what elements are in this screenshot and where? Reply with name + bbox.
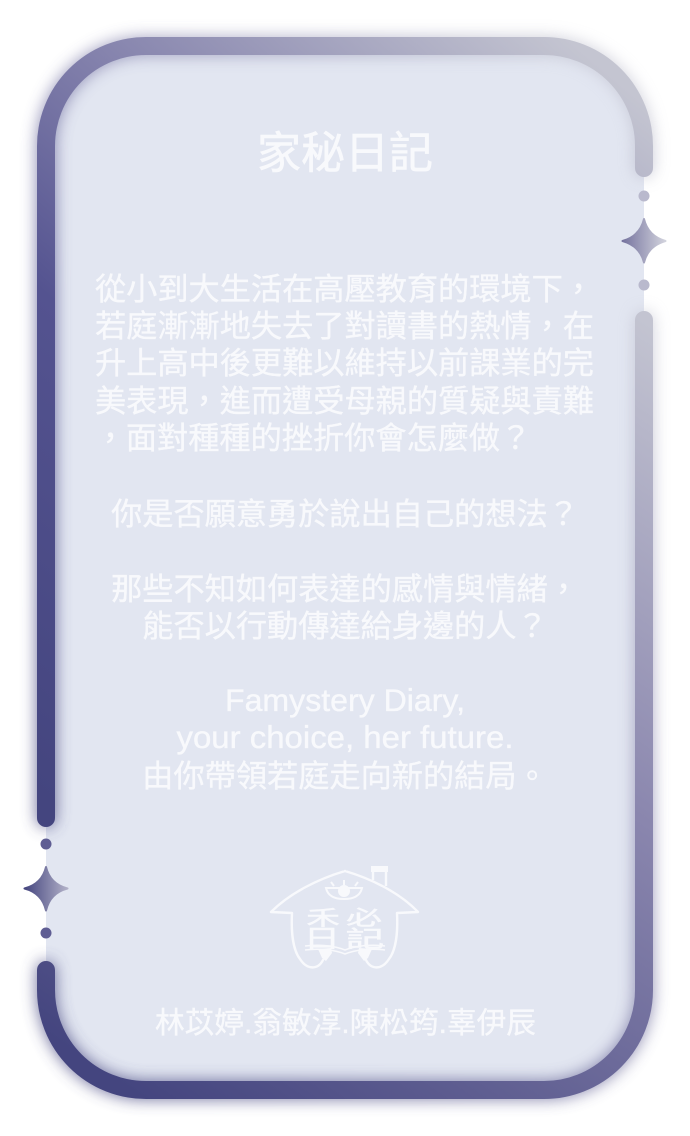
logo: lettering: 禾 xyxy=(306,907,340,929)
text block: closing tagline xyxy=(142,683,548,794)
text block: question one: 你是否願意勇於說出自己的想法？ xyxy=(111,497,579,532)
frame: upper border stroke xyxy=(46,46,644,818)
icon: right sparkle with dots xyxy=(622,190,666,290)
text block: story introduction: 從小到大生活在高壓教育的環境下， xyxy=(95,272,594,307)
frame: lower border stroke xyxy=(46,320,644,1090)
icon: house and book logo: 記 xyxy=(346,926,384,952)
text block: question two: 那些不知如何表達的感情與情緒， xyxy=(111,572,579,607)
credits: 林苡婷.翁敏淳.陳松筠.辜伊辰 xyxy=(155,1007,536,1040)
logo: chimney xyxy=(373,872,386,886)
text block: story introduction: ，面對種種的挫折你會怎麼做？ xyxy=(95,421,531,456)
text block: closing tagline: Famystery Diary, xyxy=(225,683,465,718)
icon: house and book logo xyxy=(271,866,418,967)
icon: house and book logo: 必 xyxy=(346,907,382,930)
logo: book pages xyxy=(305,945,385,954)
text block: question two: 能否以行動傳達給身邊的人？ xyxy=(142,609,548,644)
panel: background card xyxy=(46,46,644,1090)
text block: closing tagline: 由你帶領若庭走向新的結局。 xyxy=(142,759,548,794)
icon: house and book logo: 日 xyxy=(304,925,340,953)
text block: story introduction: 美表現，進而遭受母親的質疑與責難 xyxy=(95,384,594,419)
logo: house outline xyxy=(271,871,418,967)
text block: closing tagline: your choice, her future. xyxy=(176,720,514,755)
text block: story introduction: 若庭漸漸地失去了對讀書的熱情，在 xyxy=(95,309,594,344)
text block: story introduction xyxy=(95,272,594,456)
logo: hands xyxy=(318,948,372,961)
icon: left sparkle with dots xyxy=(24,838,68,938)
text block: question two xyxy=(111,572,579,644)
title: 家秘日記 xyxy=(257,129,433,178)
logo: eye xyxy=(326,880,362,899)
text block: story introduction: 升上高中後更難以維持以前課業的完 xyxy=(95,346,594,381)
